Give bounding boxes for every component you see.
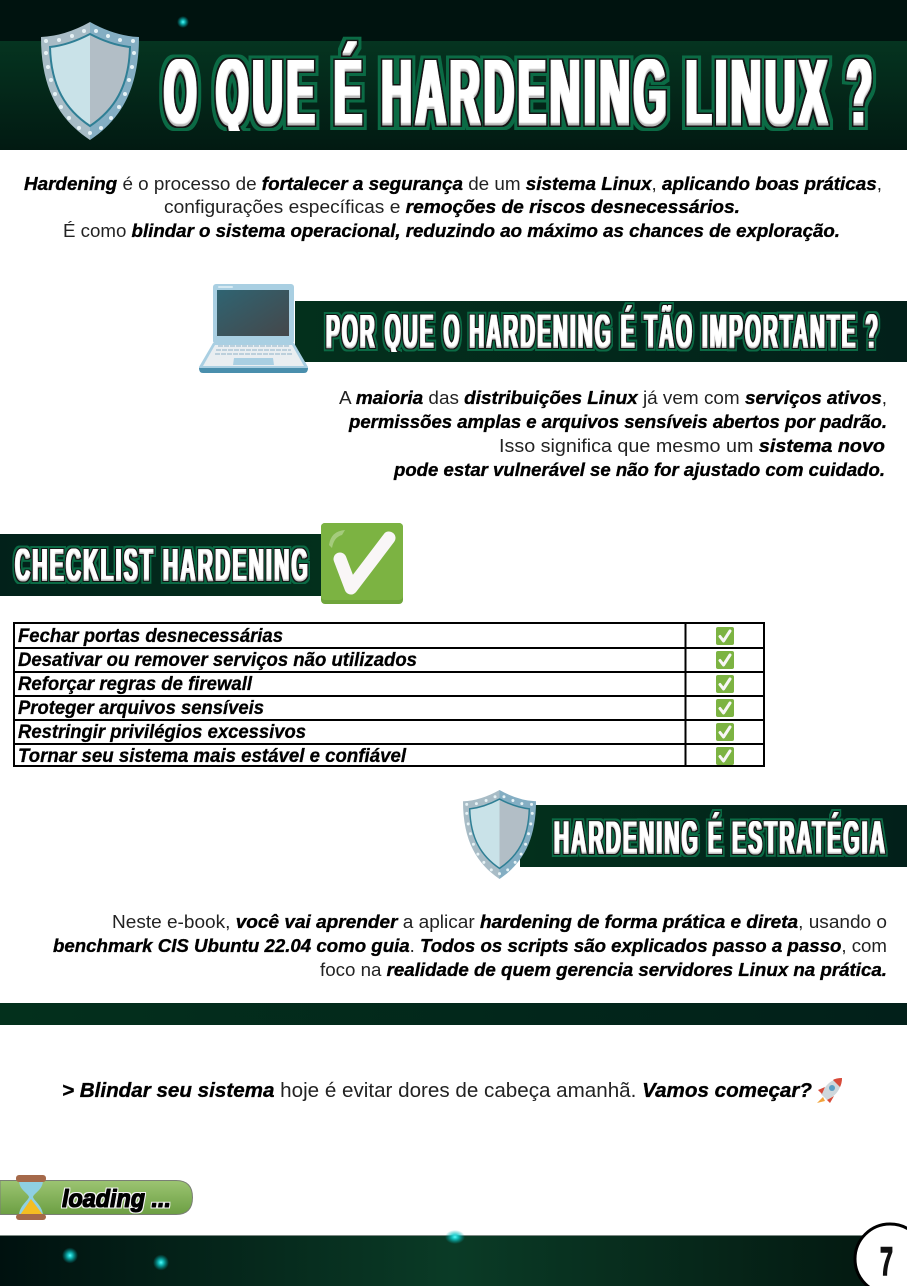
icon: laptop <box>199 284 308 373</box>
paragraph: por que: Isso significa que mesmo um sistema novo <box>499 435 885 456</box>
checklist table: Reforçar regras de firewall <box>18 674 253 695</box>
checklist table: Proteger arquivos sensíveis <box>18 698 264 719</box>
paragraph: estrategia <box>53 911 887 980</box>
loading pill <box>0 1180 192 1214</box>
paragraph: por que: A maioria das distribuições Linux já vem com serviços ativos, <box>339 387 887 408</box>
divider band <box>0 1003 907 1025</box>
intro text block <box>24 173 882 241</box>
intro text block: É como blindar o sistema operacional, reduzindo ao máximo as chances de exploração. <box>63 220 840 241</box>
icon: big check <box>321 523 403 604</box>
checklist table: Desativar ou remover serviços não utilizados <box>18 650 417 671</box>
footer band <box>0 1230 907 1286</box>
header band <box>0 0 907 150</box>
intro text block: Hardening é o processo de fortalecer a segurança de um sistema Linux, aplicando boas práticas, <box>24 173 882 194</box>
checklist table: Restringir privilégios excessivos <box>18 722 306 743</box>
paragraph: estrategia: foco na realidade de quem gerencia servidores Linux na prática. <box>320 959 887 980</box>
checklist table <box>14 623 764 767</box>
paragraph: por que: pode estar vulnerável se não for ajustado com cuidado. <box>393 459 885 480</box>
intro text block: configurações específicas e remoções de riscos desnecessários. <box>164 196 740 217</box>
page number <box>855 1224 907 1286</box>
icon: rocket <box>817 1078 842 1103</box>
loading pill: loading ... <box>62 1185 171 1213</box>
checklist table: Fechar portas desnecessárias <box>18 626 283 647</box>
paragraph: estrategia: benchmark CIS Ubuntu 22.04 como guia. Todos os scripts são explicados passo a passo, com <box>53 935 887 956</box>
text: CHECKLIST HARDENING <box>15 539 310 591</box>
icon: hourglass <box>16 1175 46 1220</box>
paragraph: por que <box>339 387 887 480</box>
icon: small shield <box>463 790 536 879</box>
heading band: checklist <box>0 534 324 596</box>
icon: header shield <box>41 22 139 140</box>
checklist table: Tornar seu sistema mais estável e confiável <box>18 746 407 767</box>
call to action: > Blindar seu sistema hoje é evitar dores de cabeça amanhã. Vamos começar? <box>62 1080 812 1102</box>
paragraph: estrategia: Neste e-book, você vai aprender a aplicar hardening de forma prática e direta , usando o <box>112 911 887 932</box>
paragraph: por que: permissões amplas e arquivos sensíveis abertos por padrão. <box>348 411 887 432</box>
page number: 7 <box>880 1240 893 1284</box>
